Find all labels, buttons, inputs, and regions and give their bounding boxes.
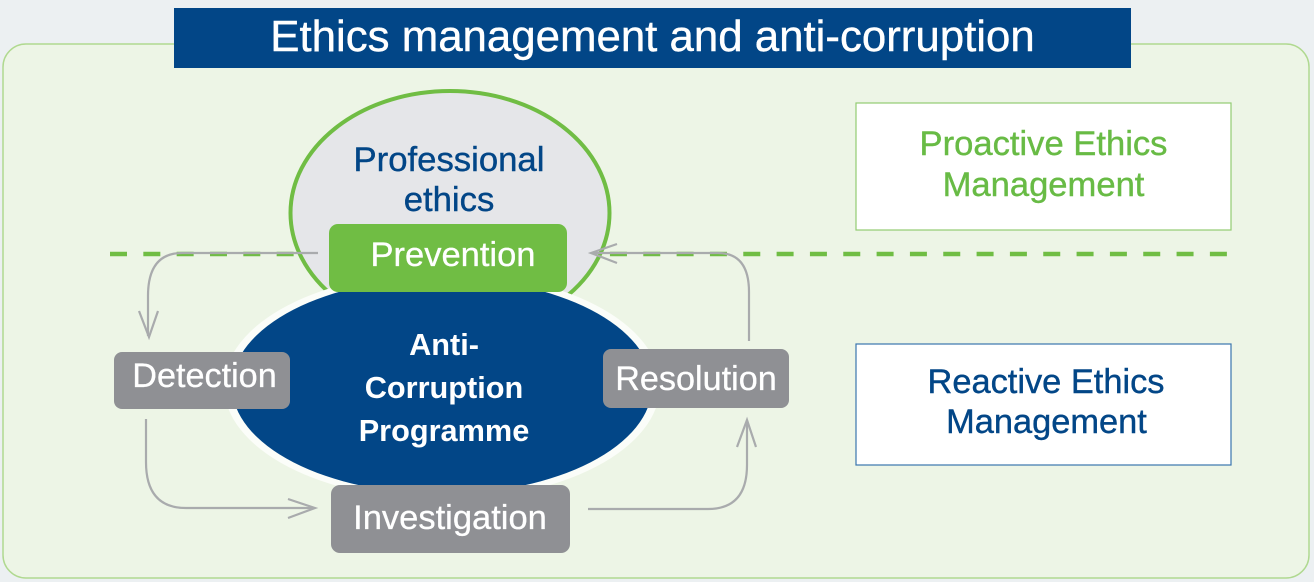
investigation box xyxy=(331,485,570,553)
anti-corruption programme ellipse: Programme xyxy=(359,413,529,448)
title xyxy=(174,8,1131,68)
anti-corruption programme ellipse xyxy=(224,272,660,500)
arrow: investigation to resolution xyxy=(588,420,756,509)
panel: reactive ethics management: Management xyxy=(946,403,1147,441)
professional ethics ellipse: Professional xyxy=(354,141,544,179)
prevention box: Prevention xyxy=(371,236,535,274)
prevention box xyxy=(329,224,567,292)
arrow: detection to investigation xyxy=(146,419,315,518)
investigation box: Investigation xyxy=(353,499,547,537)
detection box: Detection xyxy=(132,357,277,395)
panel: proactive ethics management: Proactive Ethics xyxy=(920,125,1167,163)
anti-corruption programme ellipse: Corruption xyxy=(365,370,523,405)
anti-corruption programme ellipse: Anti- xyxy=(409,327,479,362)
professional ethics ellipse xyxy=(290,91,610,335)
title: Ethics management and anti-corruption xyxy=(270,12,1035,61)
detection box xyxy=(114,352,290,409)
resolution box: Resolution xyxy=(615,360,777,398)
panel: proactive ethics management xyxy=(856,103,1231,230)
professional ethics ellipse: ethics xyxy=(404,181,494,219)
arrow: prevention to detection xyxy=(139,253,318,337)
panel: proactive ethics management: Management xyxy=(943,166,1145,204)
arrow: resolution to prevention xyxy=(591,244,749,341)
panel: reactive ethics management: Reactive Ethics xyxy=(927,363,1165,401)
panel: reactive ethics management xyxy=(856,344,1231,465)
dashed divider xyxy=(110,252,1228,256)
resolution box xyxy=(603,349,789,408)
